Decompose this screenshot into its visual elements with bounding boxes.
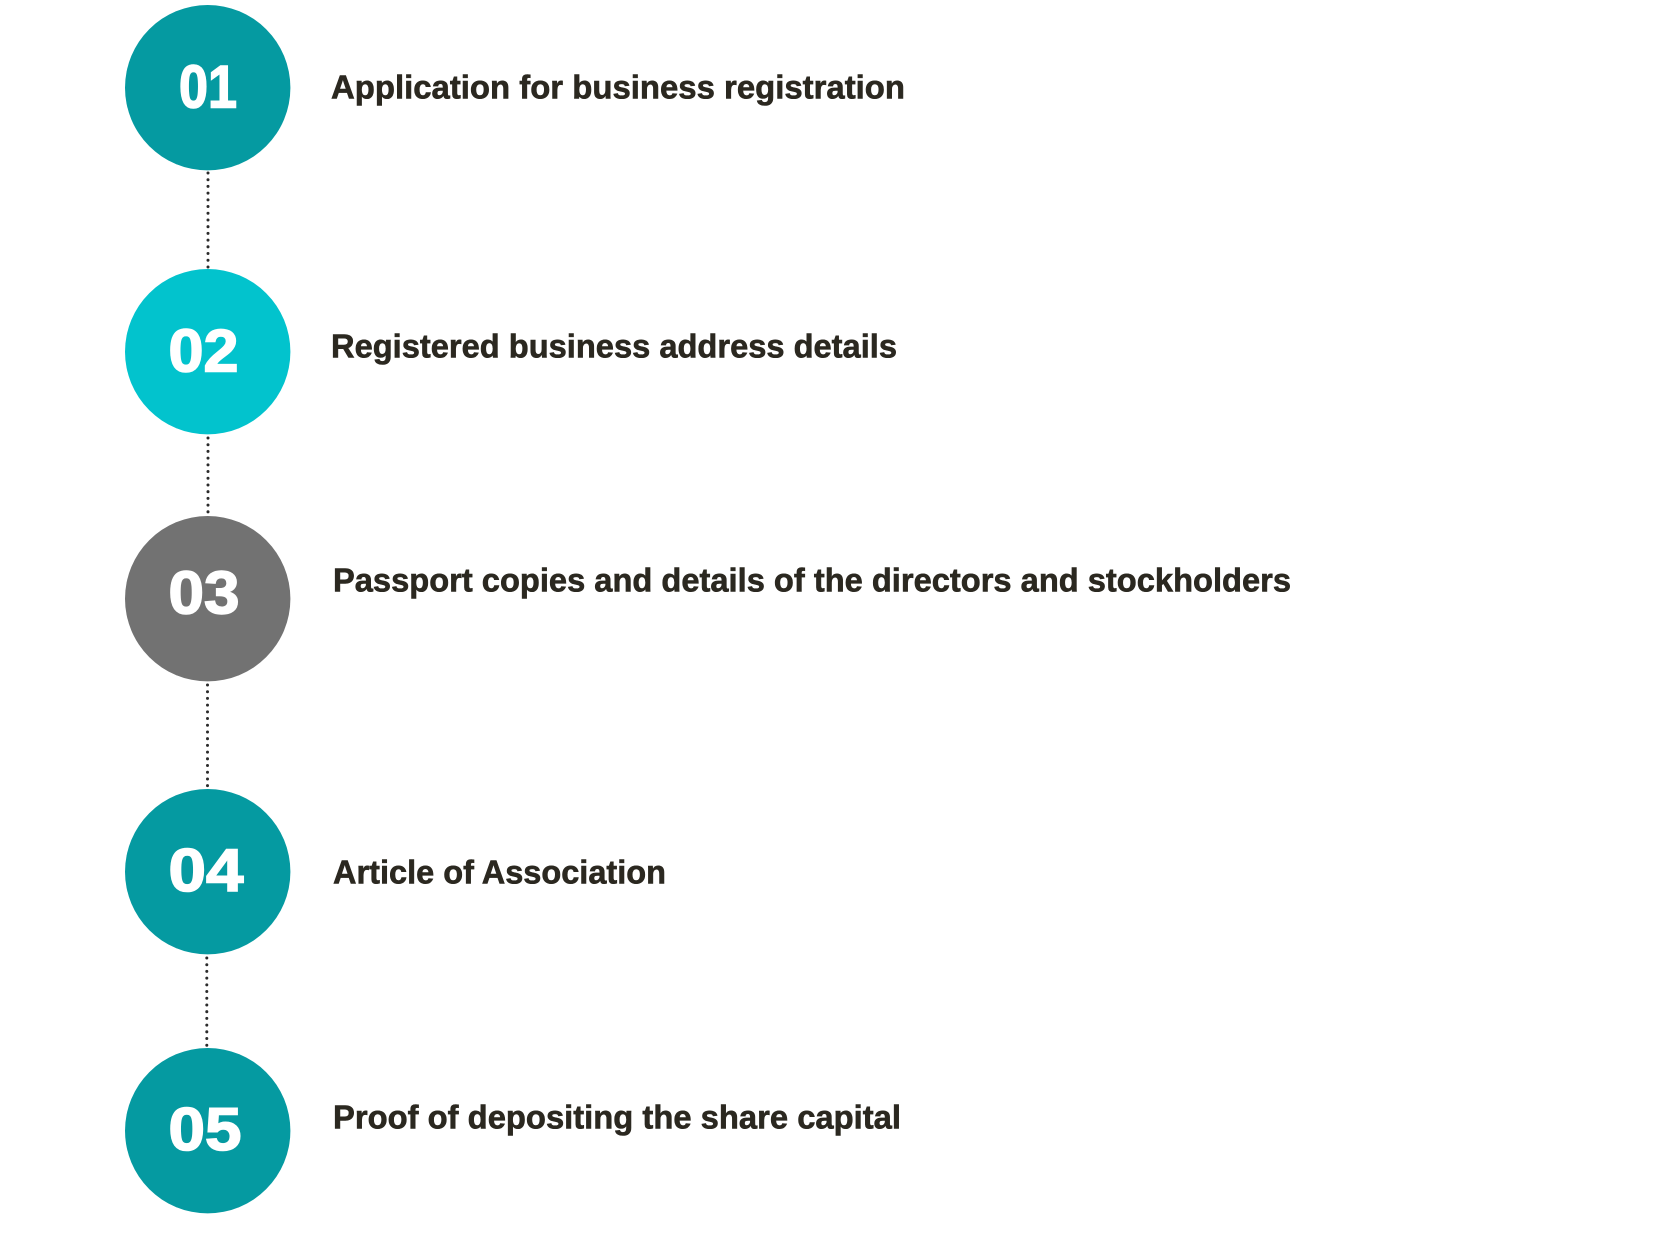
badge 01: 01 bbox=[179, 54, 237, 120]
badge 02: 02 bbox=[168, 318, 238, 384]
connector: step 3 to 4 bbox=[206, 685, 209, 789]
badge 04: 04 bbox=[168, 837, 244, 904]
badge 04 bbox=[125, 789, 290, 954]
step 2 bbox=[125, 269, 897, 434]
step 4 bbox=[125, 789, 666, 954]
badge 05: 05 bbox=[168, 1096, 242, 1163]
label 4: Article of Association bbox=[333, 854, 666, 890]
step 5 bbox=[125, 1048, 901, 1213]
label 3: Passport copies and details of the directors and stockholders bbox=[333, 562, 1291, 598]
connector: step 4 to 5 bbox=[205, 958, 208, 1047]
badge 05 bbox=[125, 1048, 290, 1213]
badge 03 bbox=[125, 516, 290, 681]
label 2: Registered business address details bbox=[331, 328, 897, 364]
connector: step 1 to 2 bbox=[206, 173, 210, 268]
badge 01 bbox=[125, 5, 290, 170]
step 1 bbox=[125, 5, 905, 170]
label 5: Proof of depositing the share capital bbox=[333, 1098, 901, 1136]
connector: step 2 to 3 bbox=[206, 438, 210, 516]
badge 03: 03 bbox=[168, 560, 240, 626]
step 3 bbox=[125, 516, 1291, 681]
badge 02 bbox=[125, 269, 290, 434]
label 1: Application for business registration bbox=[331, 68, 905, 106]
